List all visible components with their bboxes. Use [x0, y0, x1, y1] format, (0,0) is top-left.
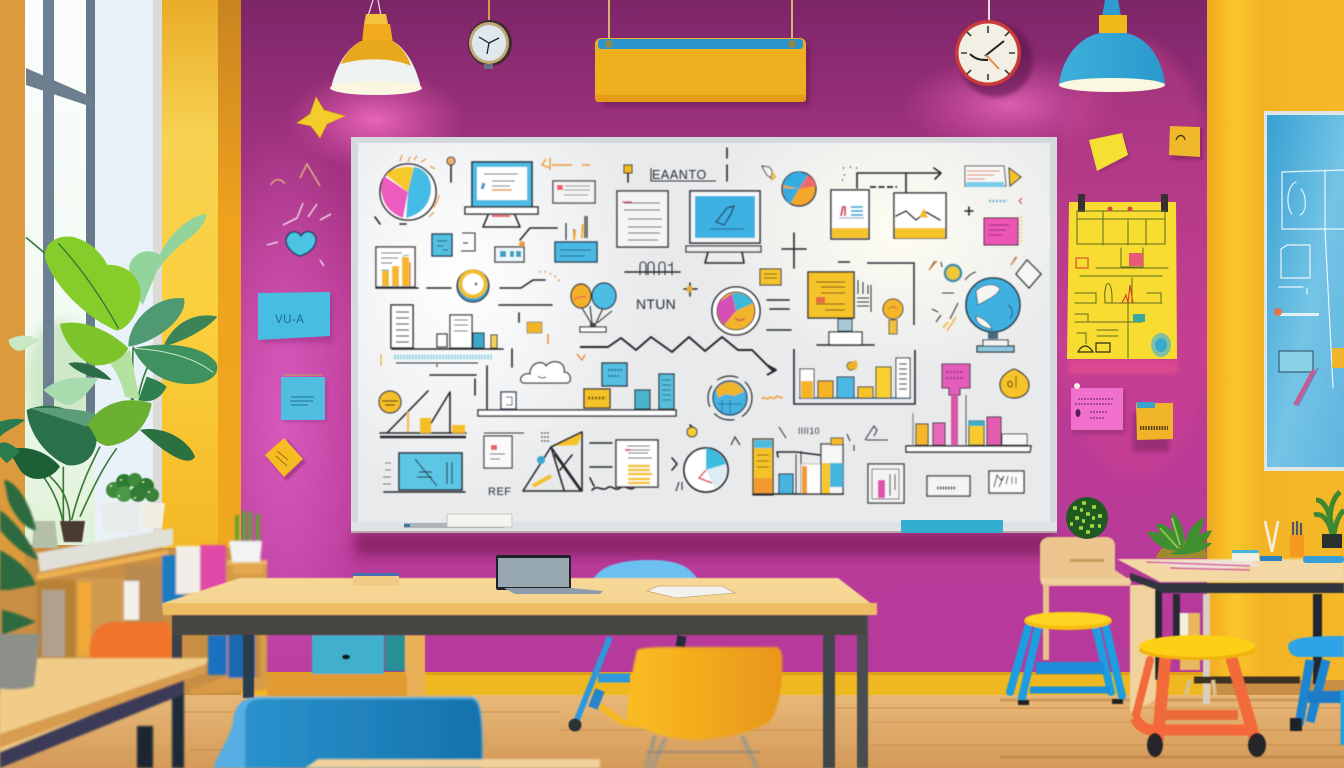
city bar row [381, 305, 512, 367]
wall decor: yellow hanging sign [595, 0, 810, 106]
card with small chart [831, 190, 869, 239]
globe badge [708, 376, 752, 420]
mini pie chart [782, 172, 816, 206]
hand lettering NTUN: NTUN [636, 296, 676, 312]
pink note [984, 216, 1021, 245]
zigzag trend arrow [580, 337, 776, 375]
yellow chair in foreground [600, 647, 782, 768]
tablet on table [647, 586, 735, 598]
sketch box [989, 471, 1024, 493]
sticky note: small blue note [281, 375, 327, 422]
yellow coin [379, 391, 401, 413]
document card [617, 191, 668, 247]
succulent plant [1147, 512, 1212, 558]
blue chair in foreground [213, 697, 483, 768]
board heading: EAANTO [652, 168, 707, 182]
flow arrow connector [842, 167, 941, 193]
plant: large leaves by the window [0, 214, 217, 523]
ring badge [457, 270, 489, 302]
blue bar device [555, 216, 597, 262]
document with yellow lines [616, 440, 658, 487]
yellow mini note [760, 269, 781, 285]
laptop on table [496, 555, 603, 594]
red stool [1135, 635, 1266, 757]
orange chair [90, 622, 172, 660]
main table [162, 578, 877, 768]
blue chart panel [383, 453, 465, 492]
pink sign tower [942, 364, 970, 445]
yellow face badge [1000, 369, 1029, 398]
desk items [1232, 492, 1344, 563]
bar chart card [376, 247, 418, 288]
right side drawer unit [1040, 537, 1131, 660]
bookcase and books [37, 511, 267, 695]
connector device [495, 228, 557, 262]
shelf with bars [478, 363, 676, 416]
triangle prism sketch [523, 432, 634, 491]
right table [1117, 559, 1344, 712]
framed pink bar [868, 464, 904, 503]
cloud [521, 362, 570, 383]
balloon tree [571, 283, 616, 332]
teal chart icon [432, 233, 475, 256]
stacked bar panel [753, 438, 843, 495]
blue eraser on tray [901, 520, 1003, 533]
hand lettering small: IIII10 [798, 426, 820, 436]
blue stool [1010, 612, 1123, 705]
wall decor: yellow pendant lamp [330, 0, 422, 95]
small box on table [353, 573, 399, 586]
sticky note: amber with blue tab [1133, 402, 1173, 452]
wall decor: large wall clock [955, 0, 1033, 97]
topiary plant [1066, 497, 1108, 539]
globe on stand [966, 278, 1020, 352]
sticky note: tilted yellow note [265, 438, 306, 481]
paper with red tab [484, 433, 524, 468]
wall decor: yellow star [297, 97, 345, 138]
whiteboard [351, 137, 1057, 533]
caption box [927, 476, 970, 496]
diamond note [1016, 260, 1041, 288]
mini text REF: REF [488, 486, 512, 498]
storage box and low shelf [267, 635, 425, 697]
wall doodle: blue heart with sparks [267, 164, 331, 266]
foreground desk at left [0, 658, 208, 768]
pie gauge [684, 448, 728, 492]
laptop doodle monitor [465, 162, 538, 227]
small potted plants on sill [32, 473, 165, 548]
yellow pin [624, 165, 632, 182]
card with line chart [894, 193, 946, 238]
yellow screen on stand [808, 272, 874, 345]
bulb icon [883, 299, 903, 334]
shelf with bars right [906, 413, 1031, 452]
sticky note: blue VU-A [258, 292, 333, 343]
small note card [553, 181, 595, 203]
blue chair behind table [568, 560, 698, 732]
pie chart middle [712, 287, 760, 335]
wall decor: small wall clock [468, 0, 512, 69]
sticky note: pink list [1071, 383, 1125, 434]
blue side whiteboard [1264, 111, 1344, 471]
triangle growth chart [380, 391, 466, 437]
foreground table corner [305, 759, 600, 768]
blue stool at right edge [1288, 636, 1344, 745]
monitor doodle right [686, 191, 761, 263]
pie chart top left [375, 155, 439, 224]
hand lettering loops [625, 262, 680, 275]
pencil banner [965, 166, 1021, 187]
cross mark [782, 233, 806, 268]
marker on tray [404, 514, 512, 528]
framed bar chart [794, 349, 915, 404]
yellow poster with sketches [1067, 194, 1178, 374]
sticky note: tilted lime note [1089, 133, 1130, 172]
wall decor: blue pendant lamp [1059, 0, 1165, 92]
sticky note: blue VU-A: VU-A [275, 314, 304, 326]
small arrow orange [542, 158, 590, 170]
pin icon [447, 157, 455, 182]
sticky note: amber note [1169, 126, 1203, 160]
potted plant at far left [0, 480, 40, 689]
